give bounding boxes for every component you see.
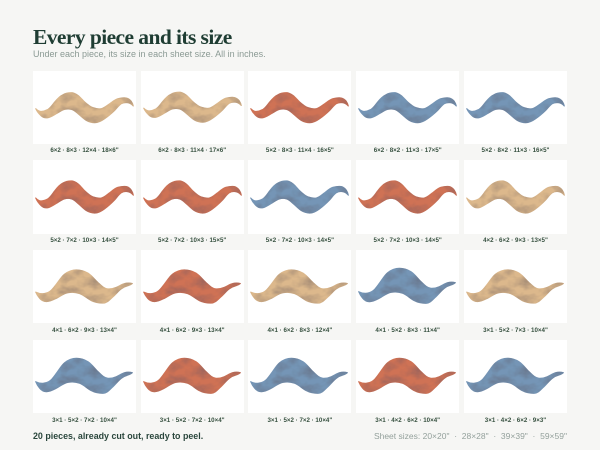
size caption: 4×1 · 5×2 · 8×3 · 11×4" — [375, 326, 440, 334]
size caption: 3×1 · 5×2 · 7×2 · 10×4" — [160, 416, 225, 424]
wave: blue — [248, 160, 351, 234]
panel: piece 7 — [141, 160, 244, 244]
title: Every piece and its size — [33, 24, 232, 48]
size caption: 4×1 · 6×2 · 8×3 · 12×4" — [267, 326, 332, 334]
wave: terracotta — [356, 160, 459, 234]
wave: tan — [464, 160, 567, 234]
wave: terracotta — [141, 340, 244, 413]
size caption: 6×2 · 8×3 · 11×4 · 17×6" — [158, 147, 226, 154]
wave: terracotta — [33, 160, 136, 234]
panel: piece 8 — [248, 160, 351, 244]
sheet sizes: Sheet sizes: 20×20" · 28×28" · 39×39" · 59×59" — [374, 431, 567, 441]
wave: terracotta — [356, 340, 459, 413]
size caption: 3×1 · 5×2 · 7×2 · 10×4" — [52, 416, 117, 424]
panel: piece 4 — [356, 71, 459, 154]
wave: terracotta — [248, 71, 351, 144]
size caption: 3×1 · 4×2 · 6×2 · 9×3" — [485, 416, 546, 424]
size caption: 5×2 · 7×2 · 10×3 · 14×5" — [50, 237, 119, 244]
size caption: 3×1 · 5×2 · 7×2 · 10×4" — [267, 416, 332, 424]
wave: blue — [356, 71, 459, 144]
wave: blue — [464, 71, 567, 144]
subtitle: Under each piece, its size in each sheet size. All in inches. — [33, 48, 266, 58]
panel: piece 2 — [141, 71, 244, 154]
wave: terracotta — [141, 250, 244, 323]
wave: blue — [248, 340, 351, 413]
size caption: 4×2 · 6×2 · 9×3 · 13×5" — [483, 237, 548, 244]
panel: piece 9 — [356, 160, 459, 244]
panel: piece 16 — [33, 340, 136, 424]
wave: blue — [356, 250, 459, 323]
wave: blue — [464, 340, 567, 413]
panel: piece 10 — [464, 160, 567, 244]
footer note: 20 pieces, already cut out, ready to peel. — [33, 431, 203, 441]
panel: piece 13 — [248, 250, 351, 334]
size caption: 6×2 · 8×2 · 11×3 · 17×5" — [374, 147, 442, 154]
panel: piece 1 — [33, 71, 136, 154]
wave: tan — [33, 250, 136, 323]
size caption: 3×1 · 5×2 · 7×3 · 10×4" — [483, 326, 548, 334]
wave: tan — [464, 250, 567, 323]
size caption: 6×2 · 8×3 · 12×4 · 18×6" — [50, 147, 119, 154]
size caption: 5×2 · 7×2 · 10×3 · 14×5" — [266, 237, 334, 244]
size caption: 3×1 · 4×2 · 6×2 · 10×4" — [375, 416, 440, 424]
panel: piece 18 — [248, 340, 351, 424]
panel: piece 12 — [141, 250, 244, 334]
wave: tan — [248, 250, 351, 323]
panel: piece 6 — [33, 160, 136, 244]
size caption: 4×1 · 6×2 · 9×3 · 13×4" — [160, 326, 225, 334]
wave: terracotta — [141, 160, 244, 234]
panel: piece 17 — [141, 340, 244, 424]
panel: piece 3 — [248, 71, 351, 154]
panel: piece 20 — [464, 340, 567, 424]
panel: piece 15 — [464, 250, 567, 334]
panel: piece 5 — [464, 71, 567, 154]
size caption: 4×1 · 6×2 · 9×3 · 13×4" — [52, 326, 117, 334]
panel: piece 19 — [356, 340, 459, 424]
wave: blue — [33, 340, 136, 413]
wave: tan — [141, 71, 244, 144]
size caption: 5×2 · 8×3 · 11×4 · 16×5" — [266, 147, 334, 154]
wave: tan — [33, 71, 136, 144]
panel: piece 11 — [33, 250, 136, 334]
size caption: 5×2 · 8×2 · 11×3 · 16×5" — [482, 147, 549, 154]
panel: piece 14 — [356, 250, 459, 334]
size caption: 5×2 · 7×2 · 10×3 · 14×5" — [374, 237, 442, 244]
size caption: 5×2 · 7×2 · 10×3 · 15×5" — [158, 237, 226, 244]
